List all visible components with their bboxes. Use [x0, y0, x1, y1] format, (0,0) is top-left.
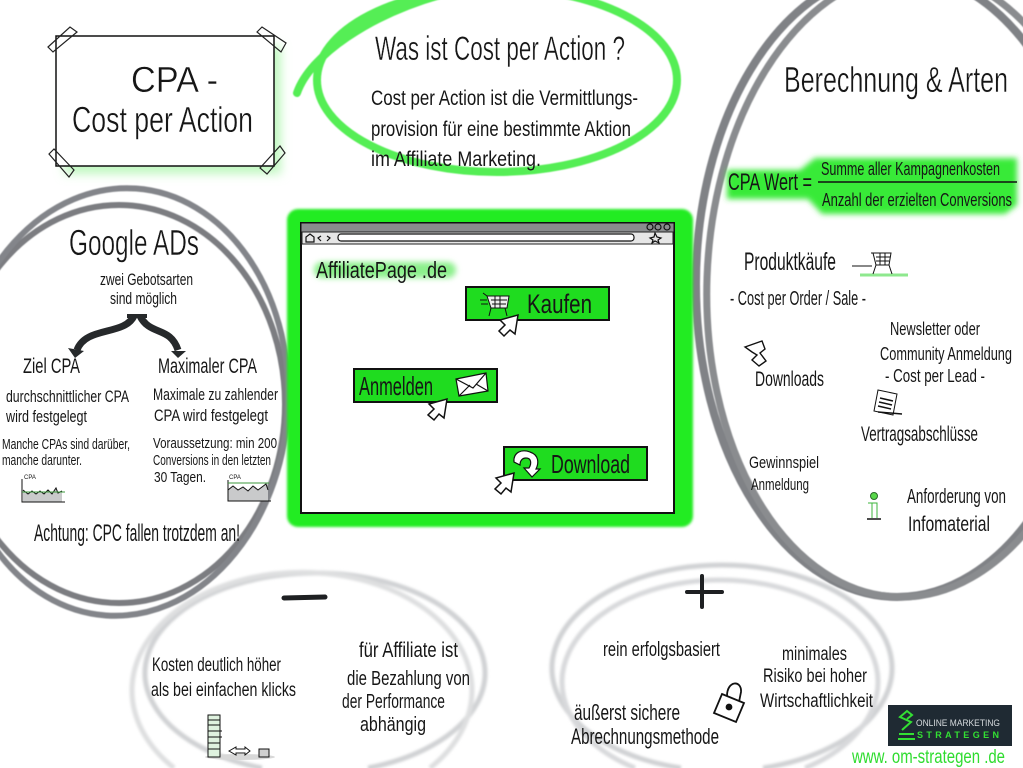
text: festgelegt: wird festgelegt [5, 407, 87, 426]
label: Anmelden [359, 371, 433, 401]
panel: bottom left minus ellipse [132, 572, 485, 768]
icon: pointer [495, 473, 514, 494]
text: gewinnspiel: Gewinnspiel [749, 453, 819, 472]
logo text line 2: STRATEGEN [917, 730, 999, 740]
heading: maximaler cpa: Maximaler CPA [158, 355, 257, 378]
icon: plus [687, 576, 722, 607]
title text: CPA - [131, 59, 218, 100]
text: wirtschaftlichkeit: Wirtschaftlichkeit [760, 691, 874, 712]
heading: affiliate page: AffiliatePage .de [316, 257, 447, 283]
icon: cart [480, 293, 509, 316]
chart: maximum cpa: CPA [229, 475, 241, 481]
heading: ziel cpa: Ziel CPA [23, 355, 80, 378]
text: risiko: Risiko bei hoher [763, 666, 868, 687]
icon: coin stacks [205, 715, 275, 760]
icon: download arrow [745, 341, 766, 366]
callout: achtung: Achtung: CPC fallen trotzdem an! [34, 520, 240, 547]
icon: pointer [428, 399, 447, 420]
text: manche: Manche CPAs sind darüber, [2, 436, 130, 453]
icon: info [867, 492, 881, 519]
text: aeusserst sichere: äußerst sichere [574, 700, 680, 725]
panel: green what-is ellipse [297, 0, 677, 172]
label: Kaufen [527, 289, 592, 319]
panel: right grey ellipse [696, 0, 1023, 604]
panel: title card [48, 27, 286, 177]
text: fuer affiliate: für Affiliate ist [359, 639, 458, 662]
text: abhaengig: abhängig [360, 714, 426, 736]
panel: bottom right plus ellipse [552, 565, 892, 768]
logo: online marketing strategen [888, 705, 1012, 746]
text: rein erfolgsbasiert: rein erfolgsbasiert [603, 639, 720, 661]
icon: pointer [499, 315, 518, 336]
text: conversions: Conversions in den letzten [153, 452, 271, 469]
icon: browser toolbar [306, 224, 670, 243]
text: infomaterial: Infomaterial [908, 513, 990, 536]
panel: browser window [287, 209, 693, 527]
text: die bezahlung: die Bezahlung von [347, 668, 470, 690]
logo text line 1: ONLINE MARKETING [916, 718, 1000, 729]
panel: left grey ellipse [0, 177, 303, 627]
icon: lock [714, 683, 744, 722]
icon: envelope [456, 373, 488, 396]
chart: average cpa [22, 475, 65, 502]
text: cost per order: - Cost per Order / Sale - [730, 288, 866, 310]
panel: google ads [2, 222, 278, 547]
button: anmelden [354, 369, 497, 420]
text: tagen: 30 Tagen. [154, 469, 206, 486]
text: downloads: Downloads [755, 368, 824, 391]
icon: shopping cart [852, 253, 908, 275]
panel: plus content [571, 576, 874, 749]
title text second line: Cost per Action [72, 99, 253, 140]
button: kaufen [466, 287, 609, 336]
label: Download [551, 449, 630, 479]
icon: download arrow [514, 451, 540, 477]
button: download [495, 447, 647, 494]
text: cpa wird: CPA wird festgelegt [154, 406, 268, 425]
text: cost per lead: - Cost per Lead - [885, 366, 985, 386]
text: der performance: der Performance [342, 691, 445, 713]
text: newsletter: Newsletter oder [890, 319, 980, 339]
icon: minus [284, 597, 325, 598]
text block: what is cost per action [371, 30, 638, 171]
text: durchschnittlicher: durchschnittlicher CPA [6, 387, 129, 406]
panel: berechnung und arten [727, 59, 1017, 536]
panel: minus content [151, 597, 470, 760]
chart: average cpa: CPA [24, 475, 36, 481]
line 2: provision für eine bestimmte Aktion [371, 118, 631, 141]
line 3: im Affiliate Marketing. [371, 148, 541, 171]
text: kosten: Kosten deutlich höher [152, 655, 281, 676]
line 1: Cost per Action ist die Vermittlungs- [371, 87, 638, 110]
text: abrechnungsmethode: Abrechnungsmethode [571, 724, 719, 749]
text: voraussetzung: Voraussetzung: min 200 [153, 435, 277, 452]
formula divider [818, 181, 1017, 183]
heading: Google ADs [69, 222, 199, 263]
text: manche darunter: manche darunter. [2, 452, 82, 469]
formula label: CPA Wert = [728, 169, 812, 196]
icon: tape corners [48, 27, 286, 177]
text: als bei: als bei einfachen klicks [151, 680, 296, 701]
icon: contract [874, 390, 902, 415]
text: minimales: minimales [782, 644, 847, 665]
text: maximale: Maximale zu zahlender [153, 385, 278, 404]
highlight: formula glow [727, 158, 1017, 214]
heading: Was ist Cost per Action ? [375, 30, 625, 68]
arrow: to both bid types [68, 314, 186, 358]
text: anmeldung: Anmeldung [751, 475, 809, 494]
subheading second line: sind möglich [110, 289, 177, 308]
icon: chess knight [898, 711, 915, 739]
text: produktkaeufe: Produktkäufe [744, 248, 836, 276]
chart: maximum cpa [228, 475, 271, 501]
subheading: zwei Gebotsarten [100, 270, 193, 289]
